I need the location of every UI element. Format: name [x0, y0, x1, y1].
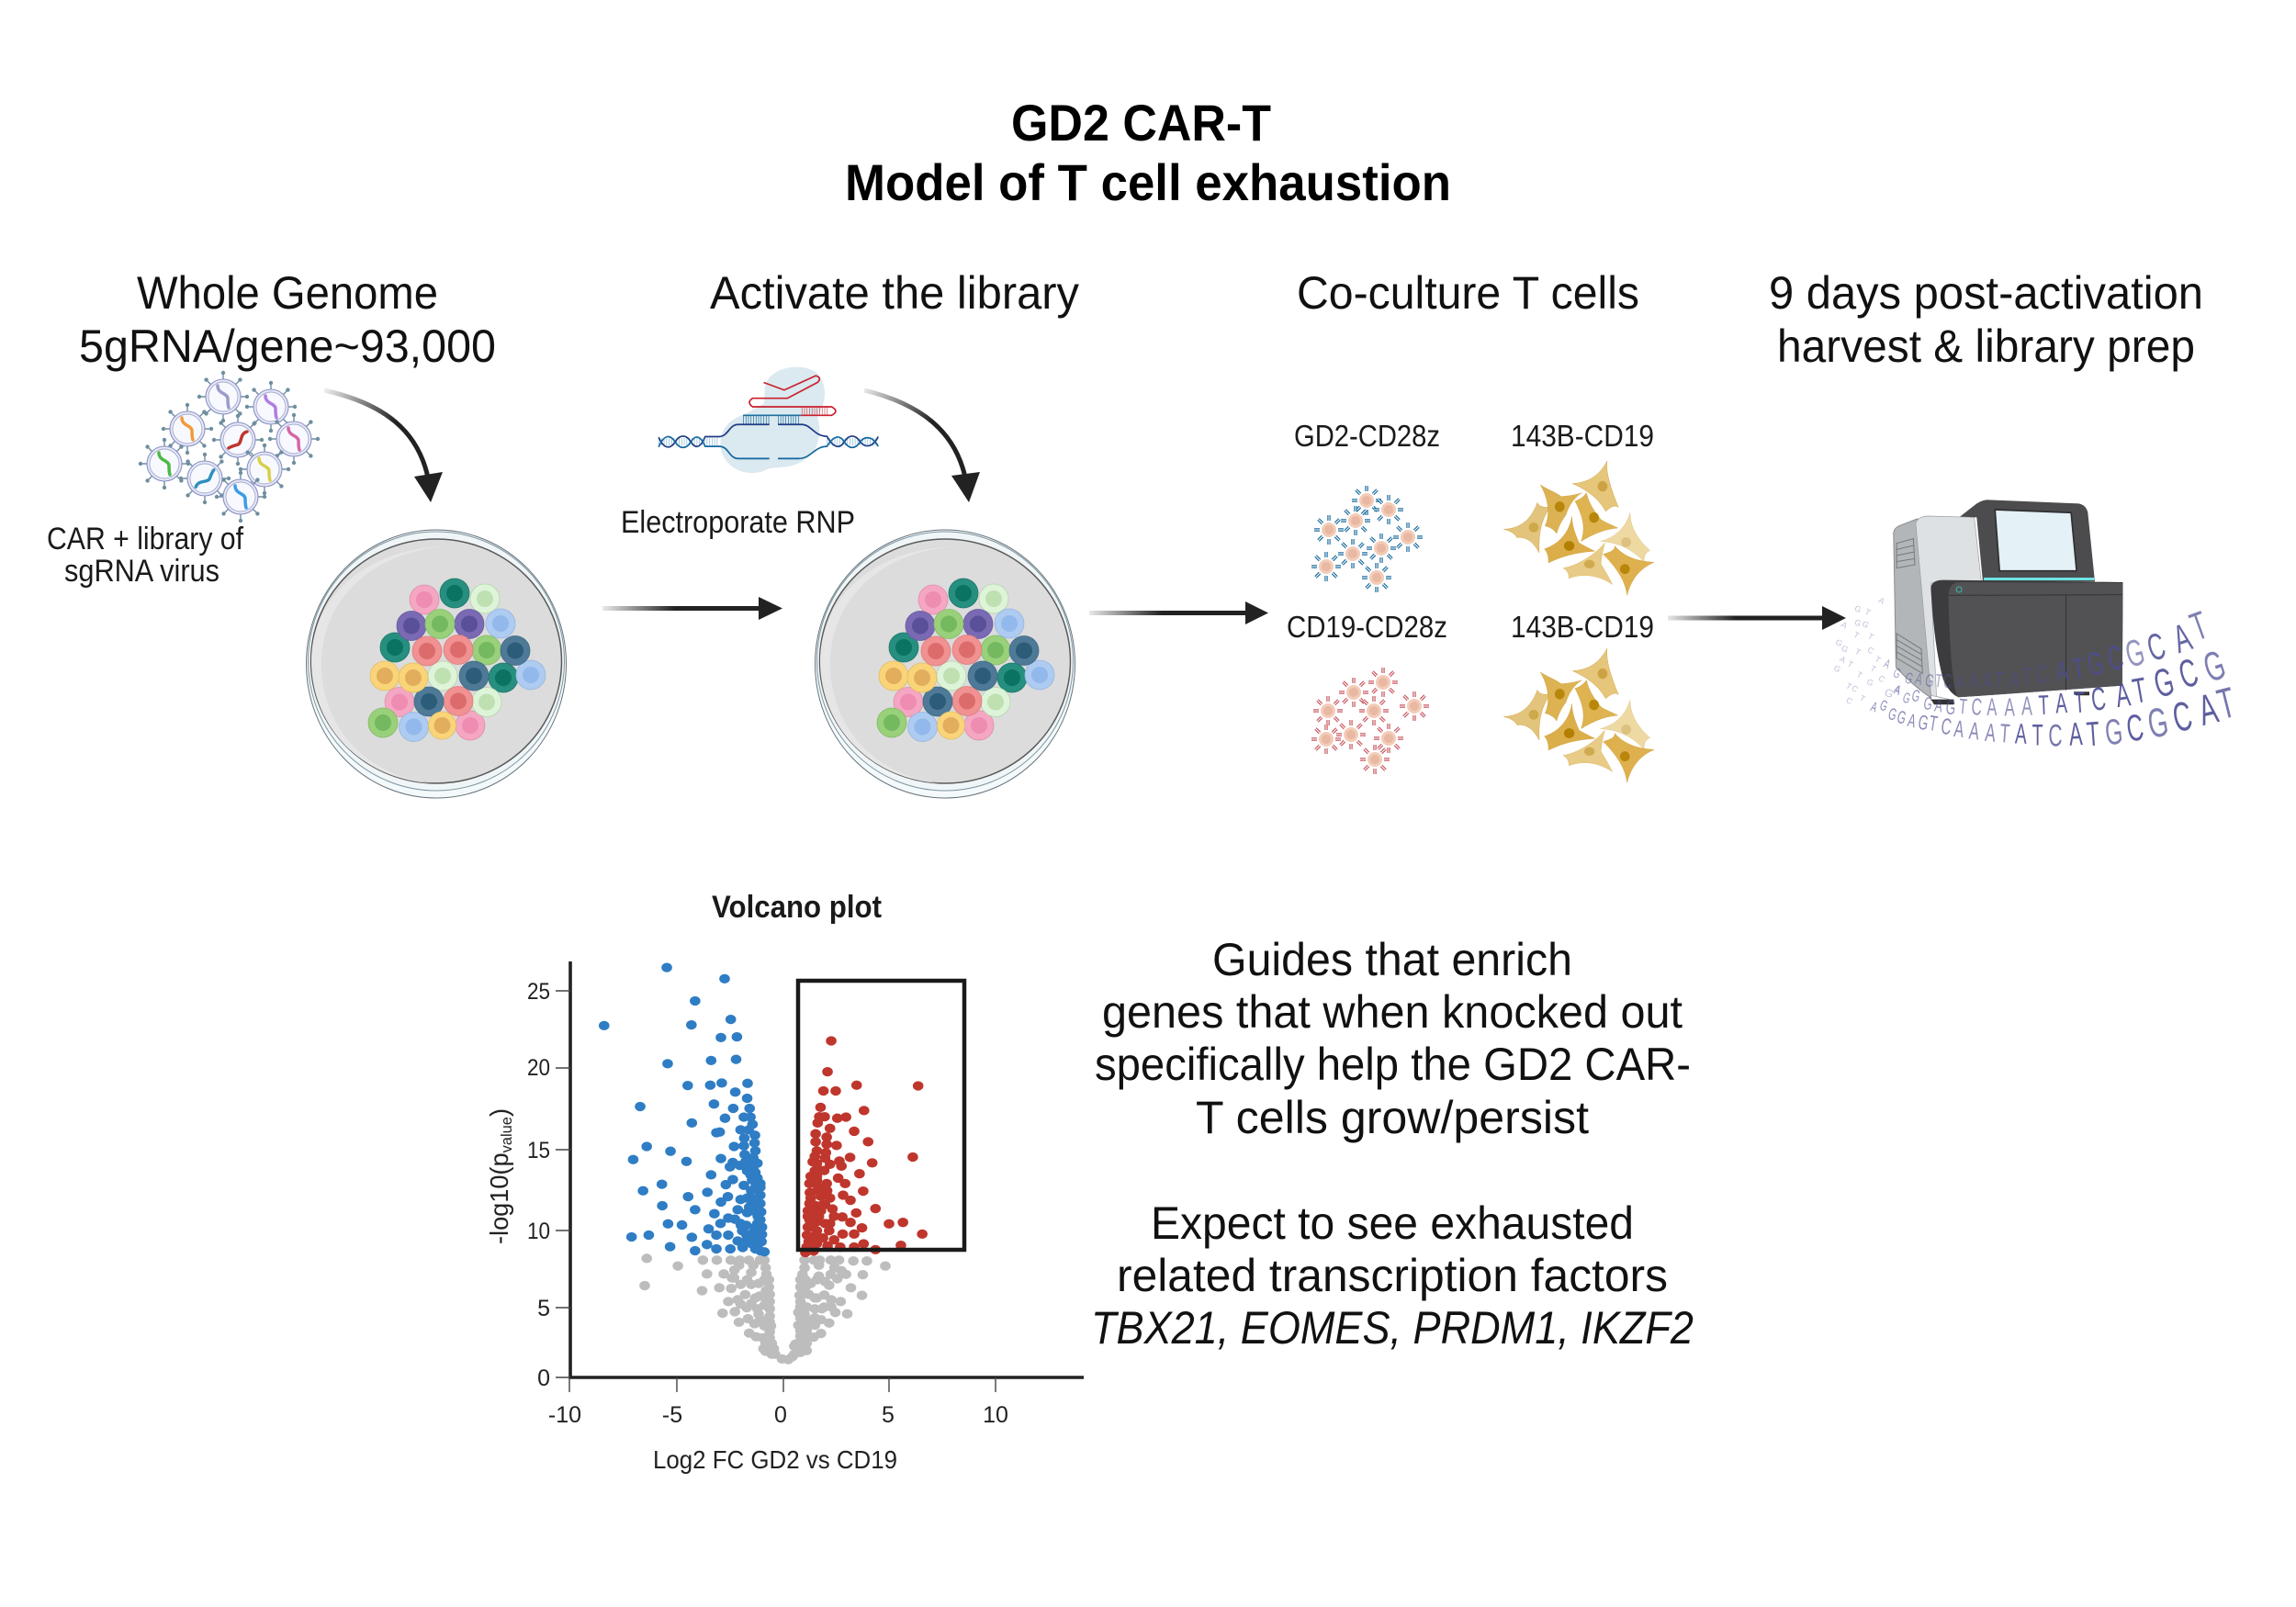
y axis tick labels: 15: [527, 1138, 550, 1163]
DNA sequence letters: [1832, 595, 2240, 754]
DNA sequence letters: A: [1969, 669, 1978, 693]
volcano plot title: Volcano plot: [712, 890, 882, 925]
heading: 9 days post-activation: harvest & library prep: [1777, 320, 2195, 372]
DNA sequence letters: G: [2122, 631, 2149, 676]
DNA sequence letters: A: [1955, 669, 1965, 693]
x axis tick labels: [548, 1402, 1008, 1428]
DNA sequence letters: A: [2068, 716, 2084, 753]
DNA sequence letters: G: [2198, 641, 2231, 691]
DNA sequence letters: T: [1846, 659, 1855, 669]
DNA sequence letters: A: [2054, 656, 2070, 688]
text block: expected transcription factors: TBX21, EOMES, PRDM1, IKZF2: [1091, 1302, 1694, 1354]
DNA sequence letters: C: [1850, 683, 1860, 694]
DNA sequence letters: C: [2089, 680, 2108, 718]
title: GD2 CAR-T: [1011, 94, 1271, 152]
text block: guides: specifically help the GD2 CAR-: [1095, 1039, 1691, 1090]
heading: 9 days post-activation: [1769, 267, 2203, 372]
text block: expected transcription factors: related transcription factors: [1117, 1250, 1668, 1301]
x axis tick labels: -10: [548, 1402, 581, 1428]
volcano plot: [485, 961, 1084, 1474]
DNA sequence letters: A: [1933, 694, 1944, 716]
DNA sequence letters: A: [1906, 710, 1919, 732]
DNA sequence letters: T: [1851, 630, 1862, 641]
x axis label: Log2 FC GD2 vs CD19: [653, 1445, 897, 1474]
DNA sequence letters: G: [1852, 603, 1863, 614]
label: CD19-CD28z: CD19-CD28z: [1287, 610, 1447, 644]
x axis tick labels: 5: [882, 1402, 895, 1428]
text block: guides: Guides that enrich: [1212, 934, 1572, 985]
DNA sequence letters: G: [1840, 644, 1850, 655]
axes: [570, 961, 1084, 1377]
DNA sequence letters: T: [2038, 690, 2050, 721]
DNA sequence letters: C: [2124, 706, 2146, 750]
text block: guides: [1095, 934, 1691, 1143]
DNA sequence letters: A: [2194, 685, 2223, 736]
y axis tick labels: 5: [537, 1296, 550, 1321]
icon: GD2 CAR T cells: [1311, 486, 1423, 592]
DNA sequence letters: T: [2032, 719, 2043, 752]
icon: sequencer with DNA letters: [1832, 500, 2240, 754]
DNA sequence letters: T: [1869, 664, 1878, 674]
DNA sequence letters: G: [1878, 697, 1890, 714]
DNA sequence letters: T: [1858, 693, 1867, 704]
selection box: [798, 981, 964, 1250]
title: [845, 94, 1451, 211]
DNA sequence letters: G: [1909, 686, 1922, 706]
DNA sequence letters: T: [1874, 655, 1883, 665]
DNA sequence letters: A: [1882, 657, 1893, 672]
DNA sequence letters: A: [1968, 716, 1981, 746]
DNA sequence letters: G: [1865, 677, 1875, 688]
DNA sequence letters: A: [1983, 669, 1992, 693]
arrow: co-culture to sequencer: [1668, 606, 1846, 630]
DNA sequence letters: G: [1861, 619, 1871, 630]
petri dish 2: [816, 530, 1075, 798]
label: electroporate RNP: Electroporate RNP: [621, 505, 855, 540]
DNA sequence letters: G: [1903, 669, 1916, 688]
DNA sequence letters: C: [2104, 637, 2127, 679]
DNA sequence letters: C: [1866, 645, 1876, 657]
DNA sequence letters: A: [1986, 693, 1998, 721]
DNA sequence letters: G: [1901, 689, 1912, 707]
DNA sequence letters: G: [1944, 695, 1957, 719]
text block: expected transcription factors: Expect to see exhausted: [1151, 1197, 1634, 1249]
DNA sequence letters: A: [2009, 666, 2020, 693]
DNA sequence letters: T: [1928, 712, 1939, 736]
DNA sequence letters: T: [1844, 681, 1853, 691]
DNA sequence letters: A: [1892, 682, 1904, 699]
DNA sequence letters: G: [1852, 617, 1863, 628]
x axis tick labels: 10: [983, 1402, 1008, 1428]
icon: CRISPR RNP complex: [658, 367, 878, 473]
DNA sequence letters: G: [2144, 698, 2172, 747]
heading: whole genome: 5gRNA/gene~93,000: [79, 320, 496, 372]
label: CAR library virus: CAR + library of: [47, 522, 243, 556]
DNA sequence letters: A: [2167, 614, 2197, 662]
arrow: virus to dish: [324, 390, 443, 502]
heading: whole genome: [79, 267, 496, 372]
text block: expected transcription factors: [1091, 1197, 1694, 1354]
DNA sequence letters: A: [1913, 669, 1924, 690]
arrow: dish 2 to co-culture: [1089, 601, 1268, 624]
DNA sequence letters: A: [1877, 595, 1886, 606]
DNA sequence letters: G: [1832, 663, 1842, 674]
DNA sequence letters: A: [1840, 620, 1849, 630]
label: 143B-CD19 top: 143B-CD19: [1511, 419, 1654, 453]
y axis tick labels: 0: [537, 1365, 550, 1391]
DNA sequence letters: A: [2004, 692, 2015, 722]
DNA sequence letters: A: [2021, 691, 2032, 722]
DNA sequence letters: C: [1942, 669, 1953, 692]
DNA sequence letters: A: [1869, 699, 1880, 715]
DNA sequence letters: T: [2212, 679, 2240, 729]
icon: CD19 CAR T cells: [1311, 668, 1429, 774]
DNA sequence letters: C: [1971, 693, 1983, 721]
DNA sequence letters: G: [1917, 710, 1930, 735]
y axis tick labels: 10: [527, 1219, 550, 1244]
DNA sequence letters: T: [2073, 686, 2087, 719]
arrow: RNP to dish: [864, 390, 980, 502]
DNA sequence letters: C: [2174, 650, 2203, 697]
DNA sequence letters: A: [1892, 684, 1902, 697]
DNA sequence letters: C: [2048, 717, 2062, 753]
DNA sequence letters: G: [2085, 645, 2106, 683]
y axis tick labels: [527, 979, 550, 1391]
DNA sequence letters: G: [2103, 711, 2124, 753]
y axis label: value: [498, 1117, 515, 1152]
petri dish 1: [307, 530, 566, 798]
y axis tick labels: 20: [527, 1055, 550, 1081]
DNA sequence letters: C: [2168, 691, 2196, 741]
icon: tumour cells bottom: [1503, 648, 1654, 782]
DNA sequence letters: T: [1866, 632, 1875, 642]
DNA sequence letters: T: [1995, 668, 2004, 694]
text block: guides: T cells grow/persist: [1196, 1092, 1589, 1143]
DNA sequence letters: C: [1844, 695, 1854, 707]
label: GD2-CD28z: GD2-CD28z: [1294, 419, 1440, 453]
label: CAR library virus: [47, 522, 243, 589]
DNA sequence letters: A: [1984, 718, 1998, 747]
DNA sequence letters: T: [1958, 694, 1968, 720]
y axis tick labels: 25: [527, 979, 550, 1005]
label: 143B-CD19 bottom: 143B-CD19: [1511, 610, 1654, 644]
DNA sequence letters: A: [2113, 675, 2133, 715]
y axis label: ): [485, 1108, 513, 1117]
label: CAR library virus: sgRNA virus: [64, 554, 219, 589]
heading: activate the library: Activate the library: [710, 267, 1079, 319]
y axis label: -log10(p: [485, 1150, 513, 1244]
DNA sequence letters: T: [2086, 714, 2101, 754]
DNA sequence letters: C: [1940, 714, 1953, 740]
DNA sequence letters: C: [1877, 673, 1887, 685]
DNA sequence letters: T: [1853, 646, 1863, 657]
DNA sequence letters: T: [1934, 670, 1943, 692]
DNA sequence letters: G: [1834, 637, 1844, 648]
x axis tick labels: 0: [774, 1402, 787, 1428]
DNA sequence letters: G: [1923, 670, 1935, 691]
DNA sequence letters: T: [1998, 719, 2010, 749]
DNA sequence letters: C: [2035, 659, 2049, 691]
DNA sequence letters: T: [2130, 669, 2150, 711]
text block: guides: genes that when knocked out: [1102, 986, 1683, 1038]
DNA sequence letters: T: [2185, 602, 2213, 649]
DNA sequence letters: G: [1895, 707, 1908, 728]
icon: tumour cells top: [1503, 461, 1654, 595]
DNA sequence letters: G: [1891, 665, 1903, 681]
x axis tick labels: -5: [662, 1402, 682, 1428]
DNA sequence letters: A: [1838, 654, 1848, 665]
DNA sequence letters: A: [2014, 719, 2028, 750]
heading: 9 days post-activation: 9 days post-activation: [1769, 267, 2203, 319]
heading: whole genome: Whole Genome: [137, 267, 438, 319]
DNA sequence letters: A: [1953, 715, 1966, 743]
DNA sequence letters: C: [2143, 624, 2170, 669]
arrow: dish 1 to dish 2: [602, 597, 782, 620]
DNA sequence letters: T: [2071, 651, 2087, 687]
DNA sequence letters: T: [2021, 662, 2032, 691]
DNA sequence letters: G: [1883, 686, 1896, 701]
DNA sequence letters: A: [2054, 688, 2068, 720]
DNA sequence letters: T: [1855, 669, 1864, 680]
axis ticks: [556, 991, 996, 1392]
title: Model of T cell exhaustion: [845, 153, 1451, 211]
DNA sequence letters: G: [1886, 704, 1898, 725]
DNA sequence letters: G: [2150, 658, 2178, 706]
data points: [604, 968, 922, 1360]
DNA sequence letters: T: [1863, 607, 1873, 618]
DNA sequence letters: G: [1921, 693, 1934, 714]
icon: virus library: [139, 371, 320, 523]
heading: co-culture T cells: Co-culture T cells: [1297, 267, 1639, 319]
